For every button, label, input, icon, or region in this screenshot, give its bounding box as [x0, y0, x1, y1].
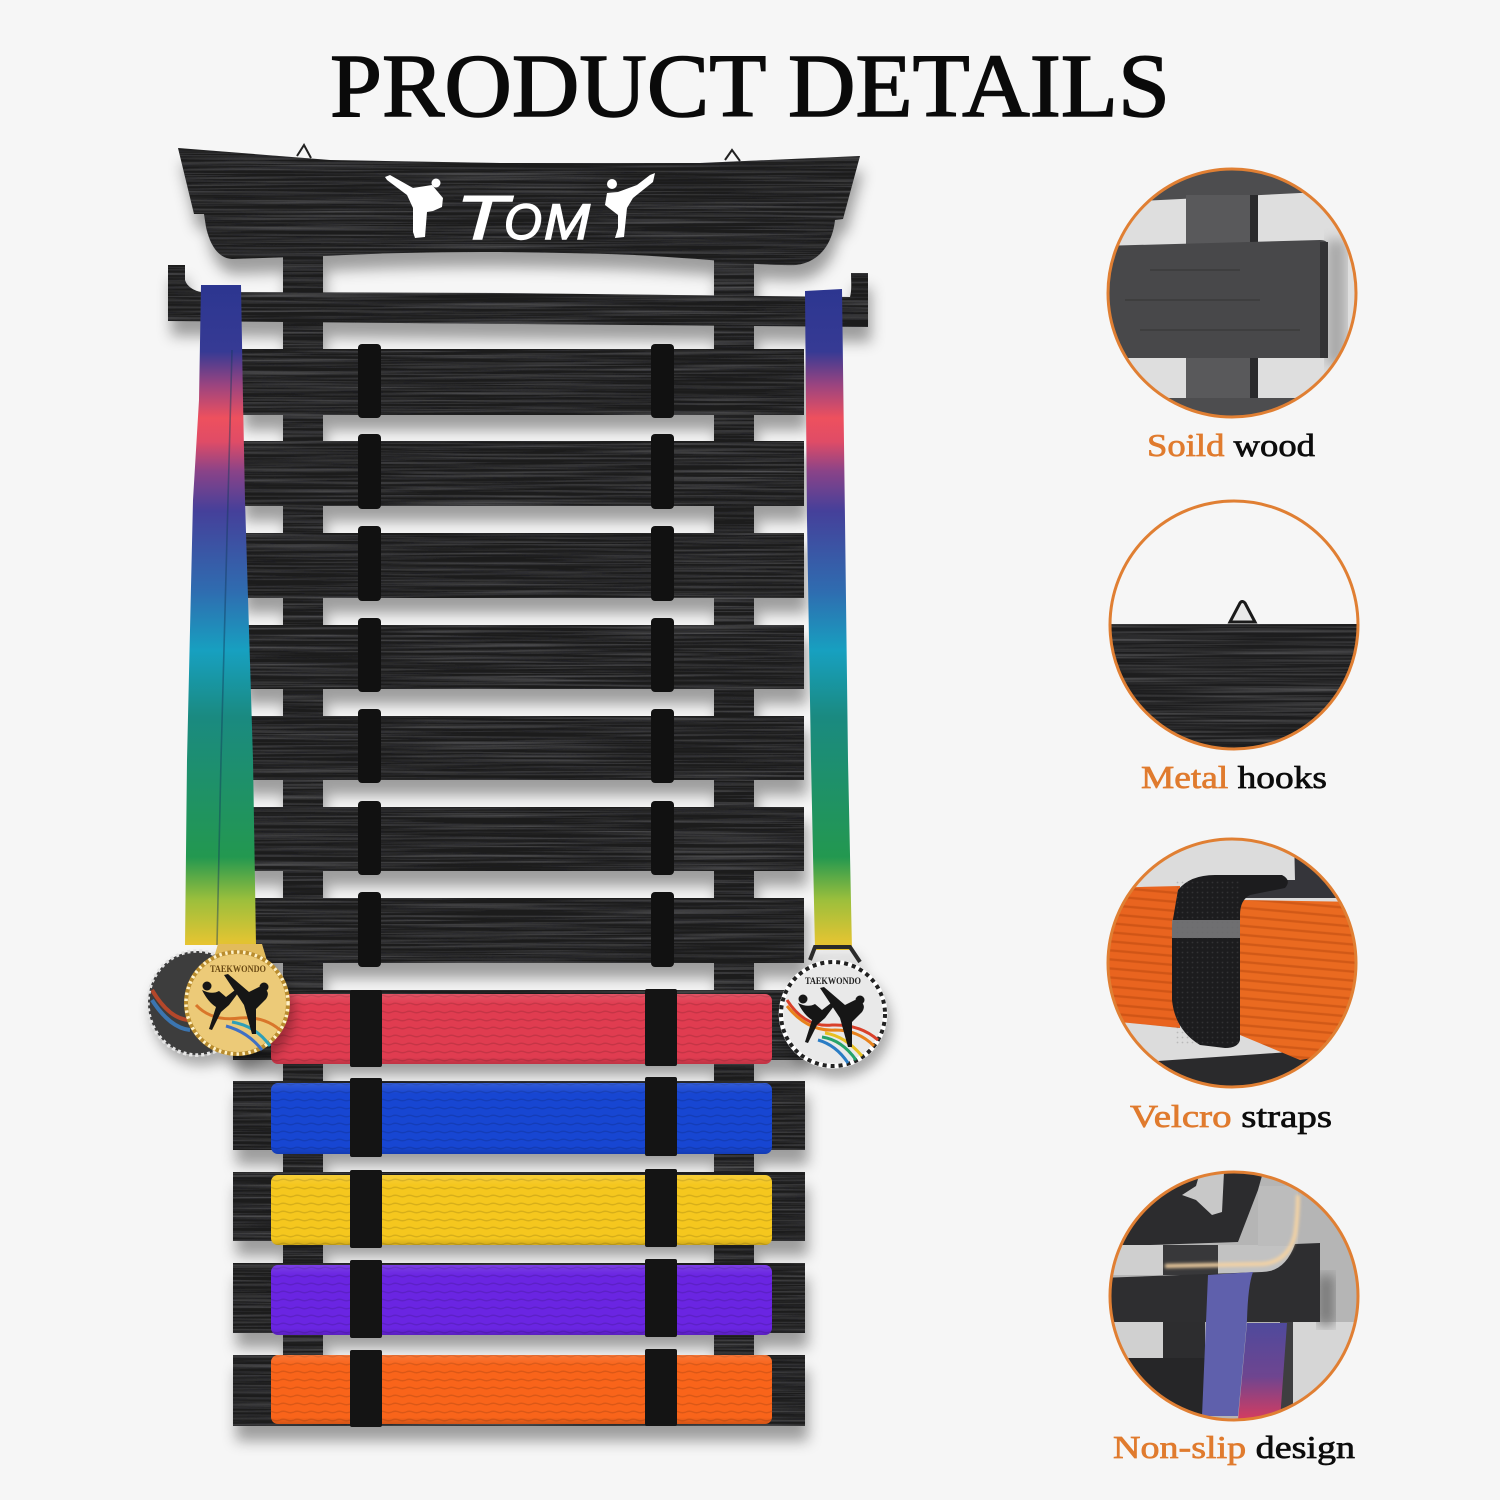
dark medal [148, 951, 246, 1055]
straps row 2 [358, 434, 674, 509]
name text [456, 184, 590, 253]
circle border [1108, 169, 1356, 417]
name text: M [544, 194, 590, 250]
orange belt [271, 1349, 772, 1427]
rail 12 [233, 1355, 805, 1426]
silver medal [780, 947, 886, 1067]
rail 2 [241, 441, 804, 506]
rail 8 [233, 990, 805, 1060]
panel: solid wood [1106, 168, 1358, 457]
right kicker silhouette [605, 173, 655, 238]
name and kicker silhouettes [385, 173, 655, 253]
caption: Non-slip design [1113, 1429, 1355, 1465]
panel: metal hooks [1108, 500, 1360, 789]
rail 6 [241, 807, 804, 871]
rail 11 [233, 1263, 805, 1333]
rail 9 [233, 1081, 805, 1150]
detail circle: strap over belt [1110, 840, 1354, 1086]
left medal ribbons [185, 285, 256, 945]
caption: Metal hooks [1141, 759, 1327, 795]
right hook [725, 150, 740, 161]
rail 10 [233, 1172, 805, 1241]
straps row 3 [358, 526, 674, 601]
name text: O [504, 194, 542, 250]
circle border [1108, 839, 1356, 1087]
right medal ribbon [805, 289, 852, 950]
rail 1 [241, 349, 804, 415]
straps row 7 [358, 892, 674, 967]
empty-rail velcro straps [358, 344, 674, 967]
top sign board [178, 148, 860, 265]
straps row 6 [358, 801, 674, 875]
panel: non-slip design [1100, 1165, 1372, 1465]
circle border [1110, 501, 1358, 749]
hanger rail with end hooks [168, 265, 868, 327]
silver medal: TAEKWONDO [805, 976, 861, 986]
rail 5 [241, 716, 804, 780]
rail 4 [241, 625, 804, 689]
detail circle: wood rail [1110, 170, 1354, 416]
caption: Soild wood [1147, 427, 1315, 463]
yellow belt [271, 1169, 772, 1248]
title: PRODUCT DETAILS [330, 37, 1170, 136]
rail 7 [241, 898, 804, 963]
straps row 1 [358, 344, 674, 418]
right upright post [714, 250, 754, 1425]
left hook [297, 145, 311, 158]
purple belt [271, 1259, 772, 1338]
straps row 4 [358, 618, 674, 692]
detail circle: hook on board [1112, 600, 1356, 748]
panel: velcro straps [1100, 835, 1370, 1134]
left kicker silhouette [385, 175, 443, 238]
metal hanging hooks [297, 145, 740, 161]
blue belt [271, 1077, 772, 1157]
left upright post [283, 250, 323, 1425]
name text: T [456, 184, 514, 253]
wooden frame [168, 148, 868, 1426]
belt display rack [148, 145, 886, 1427]
left medals [148, 944, 289, 1055]
infographic canvas [144, 56, 1360, 1466]
gold medal: TAEKWONDO [210, 964, 266, 974]
straps row 5 [358, 709, 674, 783]
rail 3 [241, 533, 804, 598]
detail circle: ribbon on hook [1112, 1174, 1356, 1418]
red belt [271, 989, 772, 1067]
caption: Velcro straps [1130, 1098, 1332, 1134]
circle border [1110, 1172, 1358, 1420]
gold medal [185, 944, 289, 1055]
